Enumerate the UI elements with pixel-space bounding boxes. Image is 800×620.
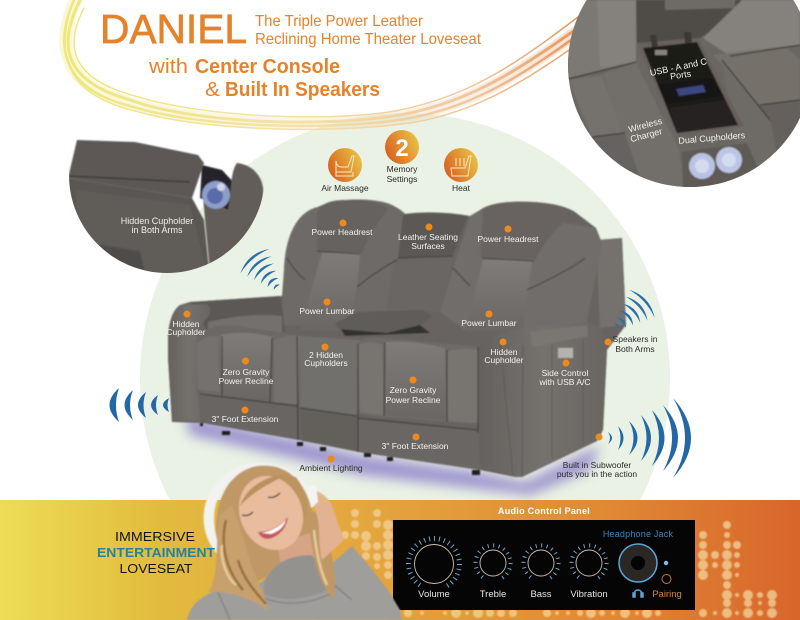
console labels: [627, 56, 746, 146]
band headline: [97, 529, 215, 576]
knob: treble: [476, 546, 510, 600]
subtitle: [255, 13, 482, 48]
sofa feature labels: Power Lumbar: [461, 318, 517, 328]
sofa feature labels: Leather Seating: [398, 232, 458, 242]
band headline: IMMERSIVE: [115, 529, 195, 544]
sofa feature labels: 2 Hidden: [309, 350, 343, 360]
tagline: &: [205, 79, 221, 101]
sofa feature labels: Power Recline: [386, 395, 441, 405]
sofa feature labels: Cupholder: [484, 355, 524, 365]
decorative swirl: [64, 0, 615, 129]
console labels: Wireless: [627, 116, 664, 134]
pairing indicators: [652, 561, 682, 600]
audio control panel: [393, 520, 695, 610]
sofa feature labels: 3" Foot Extension: [382, 441, 449, 451]
outside feature labels: Both Arms: [615, 344, 655, 354]
band headline: LOVESEAT: [120, 561, 193, 576]
label: memory settings: [387, 164, 418, 184]
outside feature labels: Ambient Lighting: [299, 463, 363, 473]
sofa purple ambient glow: [185, 415, 600, 495]
label: memory settings: Settings: [387, 174, 417, 184]
sofa feature labels: Power Headrest: [478, 234, 539, 244]
equalizer dots: [341, 509, 777, 618]
knob: vibration: [570, 546, 608, 600]
tagline: Center Console: [195, 56, 340, 78]
tagline: Built In Speakers: [225, 79, 380, 101]
inset photo: center console: [560, 0, 800, 190]
sofa feature labels: Surfaces: [411, 241, 445, 251]
outside feature labels: Built in Subwoofer: [563, 460, 631, 470]
console labels: Ports: [669, 69, 692, 81]
headphone jack: [603, 529, 673, 582]
band headline: ENTERTAINMENT: [97, 545, 215, 560]
pairing indicators: Pairing: [652, 589, 682, 600]
icon: headphones: [633, 590, 643, 597]
console labels: USB - A and C: [649, 56, 708, 78]
outside feature labels: puts you in the action: [557, 469, 637, 479]
outside feature labels: [299, 334, 658, 479]
sound waves: upper left: [237, 245, 291, 299]
console labels: Charger: [629, 126, 663, 144]
sofa feature labels: 3" Foot Extension: [212, 414, 279, 424]
sofa feature labels: Power Lumbar: [299, 306, 355, 316]
knob: volume: Volume: [418, 589, 450, 600]
sound waves: upper right: [604, 286, 659, 341]
sound waves: lower left: [110, 388, 169, 422]
sofa feature labels: Power Recline: [219, 376, 274, 386]
sofa feature labels: with USB A/C: [538, 377, 591, 387]
subtitle: The Triple Power Leather: [255, 13, 423, 30]
inset photo: arm cupholder: [68, 140, 263, 280]
tagline: [148, 56, 380, 101]
sofa feature labels: Hidden: [173, 319, 200, 329]
knob: volume: [408, 538, 460, 600]
sofa feature labels: [166, 227, 591, 451]
sofa feature labels: Side Control: [542, 368, 588, 378]
label: air massage: Air Massage: [321, 183, 369, 193]
outside feature labels: Speakers in: [613, 334, 658, 344]
knob: treble: Treble: [480, 589, 506, 600]
label: memory settings: Memory: [387, 164, 418, 174]
sofa feature labels: Hidden: [491, 347, 518, 357]
icon: heat: [444, 148, 478, 182]
loveseat: [168, 200, 626, 477]
sound waves: subwoofer: [608, 398, 691, 478]
icon: 2 memory settings: 2: [395, 135, 409, 162]
label: heat: Heat: [452, 183, 471, 193]
bottom band: [0, 500, 800, 620]
knob: vibration: Vibration: [570, 589, 608, 600]
tagline: with: [148, 56, 188, 78]
sofa feature labels: Power Headrest: [312, 227, 373, 237]
sofa feature labels: Zero Gravity: [390, 385, 437, 395]
title: DANIEL: DANIEL: [100, 6, 247, 52]
woman with headphones: [187, 463, 402, 620]
icon: 2 memory settings: [385, 130, 419, 164]
console labels: Dual Cupholders: [678, 130, 746, 146]
knob: bass: [524, 546, 558, 600]
headphone jack: Headphone Jack: [603, 529, 673, 539]
arm cupholder label: [122, 218, 194, 233]
knob: bass: Bass: [530, 589, 552, 600]
hotspot markers: [184, 220, 612, 462]
sofa feature labels: Cupholder: [166, 327, 206, 337]
arm cupholder label: in Both Arms: [131, 225, 183, 235]
arm cupholder label: Hidden Cupholder: [121, 216, 193, 226]
audio panel title: Audio Control Panel: [498, 506, 590, 516]
icon: air massage: [328, 148, 362, 182]
sofa feature labels: Cupholders: [304, 358, 348, 368]
subtitle: Reclining Home Theater Loveseat: [255, 31, 482, 48]
background circle: [140, 113, 670, 620]
sofa feature labels: Zero Gravity: [223, 367, 270, 377]
